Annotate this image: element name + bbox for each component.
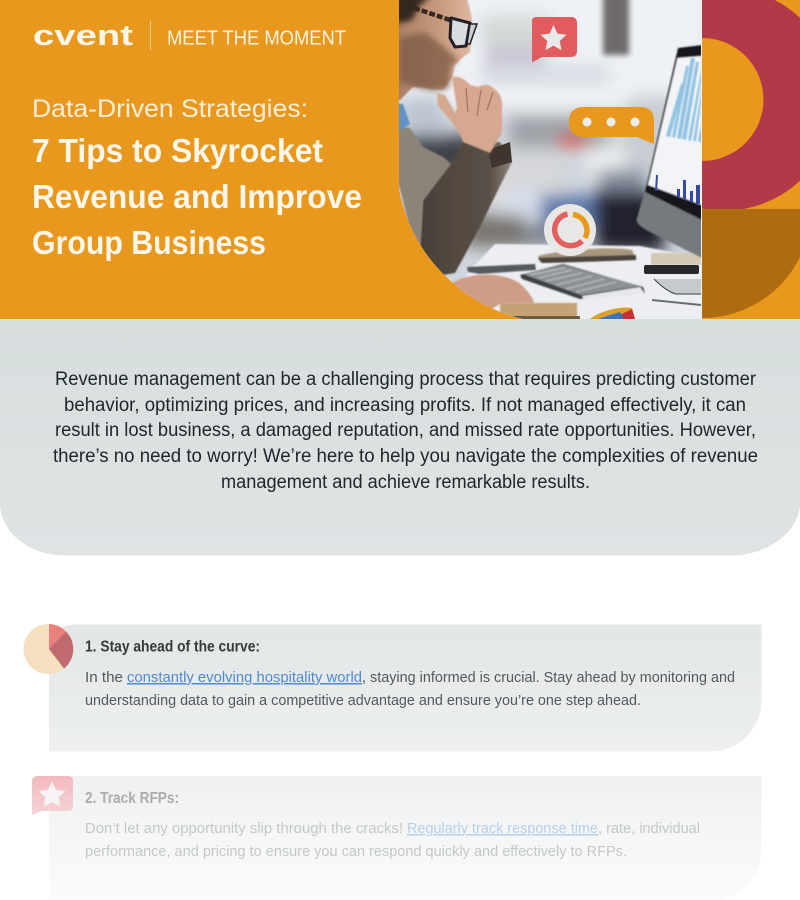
panel: tip 2 xyxy=(49,776,762,900)
tip 2 body: performance, and pricing to ensure you can respond quickly and effectively to RFPs. xyxy=(85,843,627,860)
intro text: there’s no need to worry! We’re here to help you navigate the complexities of revenue xyxy=(53,446,758,467)
logo xyxy=(33,20,346,52)
icon: faded star speech bubble xyxy=(32,776,73,815)
tip 2 body xyxy=(85,820,700,860)
tip 1 body: In the xyxy=(85,669,123,686)
title: Data-Driven Strategies: xyxy=(32,95,308,123)
title xyxy=(32,95,362,261)
desk items xyxy=(500,303,577,317)
intro text: management and achieve remarkable results. xyxy=(221,472,590,493)
intro text xyxy=(53,369,758,493)
man: collar xyxy=(399,102,410,132)
photo: man analysing data at a computer xyxy=(390,0,710,325)
logo: cvent xyxy=(33,20,133,52)
header band xyxy=(0,0,800,319)
tip 2 heading: 2. Track RFPs: xyxy=(85,790,179,807)
man: lower hand xyxy=(452,275,534,310)
panel: tip 1 xyxy=(49,624,762,752)
tip 1 heading: 1. Stay ahead of the curve: xyxy=(85,638,260,656)
title: Revenue and Improve xyxy=(32,178,362,215)
panel: introduction xyxy=(0,319,800,556)
tip 2 body: Don’t let any opportunity slip through the cracks! xyxy=(85,820,403,837)
tip 1 body: constantly evolving hospitality world xyxy=(127,669,362,686)
intro text: behavior, optimizing prices, and increasing profits. If not managed effectively, it can xyxy=(64,395,746,416)
icon: donut chart xyxy=(544,204,596,256)
tip 2 body: Regularly track response time xyxy=(407,820,598,837)
tip 1 body: , staying informed is crucial. Stay ahead by monitoring and xyxy=(362,669,735,686)
monitor xyxy=(637,45,702,258)
man: head xyxy=(395,0,473,100)
intro text: result in lost business, a damaged reputation, and missed rate opportunities. However, xyxy=(55,420,756,441)
decorative red semicircle xyxy=(702,0,800,211)
man: sleeve xyxy=(420,142,512,275)
man: sweater body xyxy=(399,126,452,245)
intro text: Revenue management can be a challenging process that requires predicting customer xyxy=(55,369,757,390)
title: 7 Tips to Skyrocket xyxy=(32,132,323,169)
keyboard xyxy=(520,264,645,300)
man: glasses xyxy=(414,8,477,47)
decorative brown quarter circle xyxy=(702,209,800,318)
tip 1 body xyxy=(85,669,735,709)
logo: MEET THE MOMENT xyxy=(167,28,346,50)
title: Group Business xyxy=(32,224,266,261)
table xyxy=(457,243,701,319)
man: hand xyxy=(437,77,502,153)
icon: pie chart xyxy=(24,624,74,674)
tip 1 body: understanding data to gain a competitive advantage and ensure you’re one step ahead. xyxy=(85,692,641,709)
icon: chat bubble with three dots xyxy=(569,107,654,144)
tip 2 body: , rate, individual xyxy=(598,820,700,837)
icon: star speech bubble xyxy=(532,17,577,62)
